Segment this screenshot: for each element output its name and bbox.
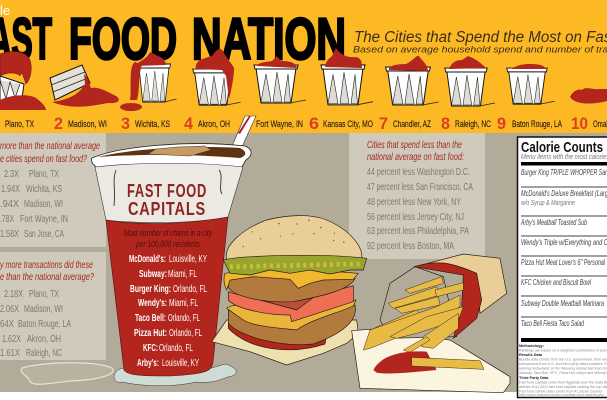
cup subheading: per 100,000 residents [135, 239, 200, 249]
panel: cities that spend less: 56 percent less Jersey City, NJ [367, 211, 464, 223]
straw [226, 116, 256, 160]
cup subheading [124, 228, 212, 249]
puddle [21, 363, 113, 384]
city ranking row: 2 [54, 114, 63, 133]
methodology notes: Third Party Data [519, 376, 549, 380]
cup heading [127, 181, 207, 219]
ketchup puddle [373, 351, 437, 373]
panel: more transactions than national average: 1.62X [2, 333, 21, 345]
panel: more transactions than national average: 2.18X [4, 288, 23, 300]
panel: spend more than national average: more than the national average [0, 140, 100, 152]
cup subheading: Most number of chains in a city [124, 228, 212, 238]
panel: more transactions than national average: Akron, OH [27, 333, 61, 345]
cup heading: FAST FOOD [127, 181, 207, 201]
cup red body [106, 217, 228, 376]
calorie list [520, 168, 607, 328]
panel: cities that spend less: 92 percent less Boston, MA [367, 240, 454, 252]
panel: spend more than national average: Madison, WI [24, 198, 63, 210]
chain capitals list [129, 253, 207, 369]
chain capitals list: Louisville, KY [162, 358, 199, 369]
cup 6 [321, 48, 373, 105]
panel: calorie counts [518, 137, 607, 398]
chain capitals list: Wendy's: [138, 297, 167, 309]
subtitle [353, 29, 607, 56]
cup 9 [507, 64, 555, 104]
city ranking row: 9 [497, 114, 506, 133]
chain capitals list: KFC: [143, 342, 158, 354]
panel: more transactions than national average: 2.06X [0, 303, 19, 315]
chain capitals list: Miami, FL [169, 298, 198, 309]
panel: more transactions than national average: e than the national average? [0, 271, 94, 283]
lettuce [223, 255, 367, 275]
chain capitals list: Pizza Hut: [134, 327, 167, 339]
panel: spend more than national average: Wichita, KS [26, 183, 62, 195]
ketchup layer [228, 320, 327, 350]
panel: cities that spend less: 48 percent less New York, NY [367, 196, 461, 208]
city ranking row: Plano, TX [5, 119, 34, 130]
cup 7 [386, 56, 439, 105]
city ranking row: Kansas City, MO [323, 119, 373, 130]
soda cup [91, 116, 256, 376]
site logo fragment: le [0, 3, 10, 18]
methodology notes: Results Data [519, 353, 543, 357]
panel: cities that spend less: 44 percent less Washington D.C. [367, 166, 470, 178]
spill under cup [114, 364, 236, 386]
fries [363, 277, 463, 352]
panel: cities that spend less: Cities that spend less than the [367, 139, 462, 151]
chain capitals list: Arby's: [137, 357, 159, 369]
city ranking row: 10 [571, 114, 588, 133]
city ranking row: 8 [441, 114, 450, 133]
panel: more transactions than national average: Baton Rouge, LA [18, 318, 71, 330]
cup 4 [193, 49, 241, 105]
city ranking row: Akron, OH [198, 119, 230, 130]
upper patty [228, 276, 355, 302]
title: FOOD [69, 7, 177, 72]
methodology notes: Fast food calorie data comes from A Calorie Counter [519, 390, 603, 394]
panel: spend more than national average: 1.94X [1, 183, 20, 195]
panel: more transactions than national average: y more transactions did these [0, 259, 93, 271]
cup 2 tipped [50, 65, 142, 111]
chain capitals list: McDonald's: [129, 253, 166, 265]
city ranking row: Wichita, KS [135, 119, 170, 130]
panel: spend more than national average: Fort Wayne, IN [20, 213, 68, 225]
chain capitals list: Miami, FL [168, 269, 197, 280]
box sleeve [415, 254, 507, 313]
chain capitals list: Taco Bell: [135, 312, 166, 324]
city ranking row: Raleigh, NC [455, 119, 491, 130]
panel: more transactions than national average: Madison, WI [24, 303, 63, 315]
city ranking row: 6 [309, 114, 319, 133]
fries box back [380, 267, 457, 338]
title [0, 7, 346, 72]
panel: more transactions than national average: 1.61X [0, 347, 20, 359]
drip decorations [114, 170, 222, 206]
box red band [414, 263, 482, 338]
panel: spend more than national average: 2.3X [4, 168, 19, 180]
cup 5 [254, 56, 306, 103]
panel: spend more than national average: San Jose, CA [24, 228, 64, 240]
lower cheese [227, 300, 356, 330]
panel: spend more than national average: 1.58X [0, 228, 19, 240]
methodology notes: Subway, Taco Bell, KFC, Pizza Hut, Arby's and Wendy's [519, 371, 607, 375]
city ranking row: 4 [184, 114, 194, 133]
city ranking row [5, 114, 607, 133]
methodology notes: http://www.acaloriecounter.com/fast-food-calories.php [519, 393, 604, 397]
panel: spend more than national average [0, 133, 106, 247]
panel: cities that spend less: 47 percent less San Francisco, CA [367, 181, 473, 193]
panel: spend more than national average: .78X [0, 213, 14, 225]
cup white top [95, 163, 243, 223]
chain capitals list: Subway: [139, 268, 167, 280]
chain capitals list: Orlando, FL [173, 284, 207, 295]
panel: more transactions than national average [0, 252, 106, 360]
french fries illustration [352, 254, 510, 393]
hamburger illustration [212, 216, 367, 365]
panel: more transactions than national average: 64X [0, 318, 14, 330]
city ranking row: Chandler, AZ [393, 119, 431, 130]
calorie list: w/o Syrup & Margarine [521, 198, 575, 207]
city ranking row: Fort Wayne, IN [256, 119, 303, 130]
cup lid rim and soda [91, 144, 251, 170]
chain capitals list: Orlando, FL [159, 343, 193, 354]
city ranking row: Madison, WI [68, 119, 107, 130]
chain capitals list: Orlando, FL [168, 313, 200, 324]
city ranking row: Baton Rouge, LA [512, 119, 562, 130]
cup 3 [130, 52, 176, 102]
city ranking row: 3 [121, 114, 130, 133]
gray background [0, 133, 607, 392]
panel: cities that spend less [349, 133, 485, 259]
panel: spend more than national average: Plano, TX [29, 168, 59, 180]
methodology notes [519, 344, 607, 397]
city ranking row: 7 [379, 114, 388, 133]
ketchup cups row [0, 48, 607, 111]
panel: more transactions than national average: Plano, TX [29, 288, 59, 300]
chain capitals list: Burger King: [130, 283, 171, 295]
cup 10 spill [570, 88, 607, 104]
cup 1 [0, 52, 46, 110]
panel: spend more than national average: .94X [0, 198, 19, 210]
panel: cities that spend less: 63 percent less Philadelphia, PA [367, 225, 469, 237]
upper cheese [224, 269, 358, 290]
methodology notes: Methodology: [519, 344, 544, 348]
chain capitals list: Louisville, KY [169, 254, 207, 265]
bottom bun [212, 320, 358, 365]
chain capitals list: Orlando, FL [169, 328, 202, 339]
lower patty [228, 305, 355, 345]
panel: more transactions than national average: Raleigh, NC [26, 347, 62, 359]
top bun [226, 216, 362, 265]
cup heading: CAPITALS [128, 199, 206, 219]
panel: spend more than national average: e cities spend on fast food? [0, 153, 87, 165]
yellow header band [0, 0, 607, 133]
panel: cities that spend less: national average on fast food: [367, 151, 464, 163]
single fry [412, 357, 484, 369]
cup 8 [445, 56, 495, 106]
tomato [228, 286, 353, 322]
title: NATION [192, 7, 346, 72]
napkin [352, 329, 510, 393]
